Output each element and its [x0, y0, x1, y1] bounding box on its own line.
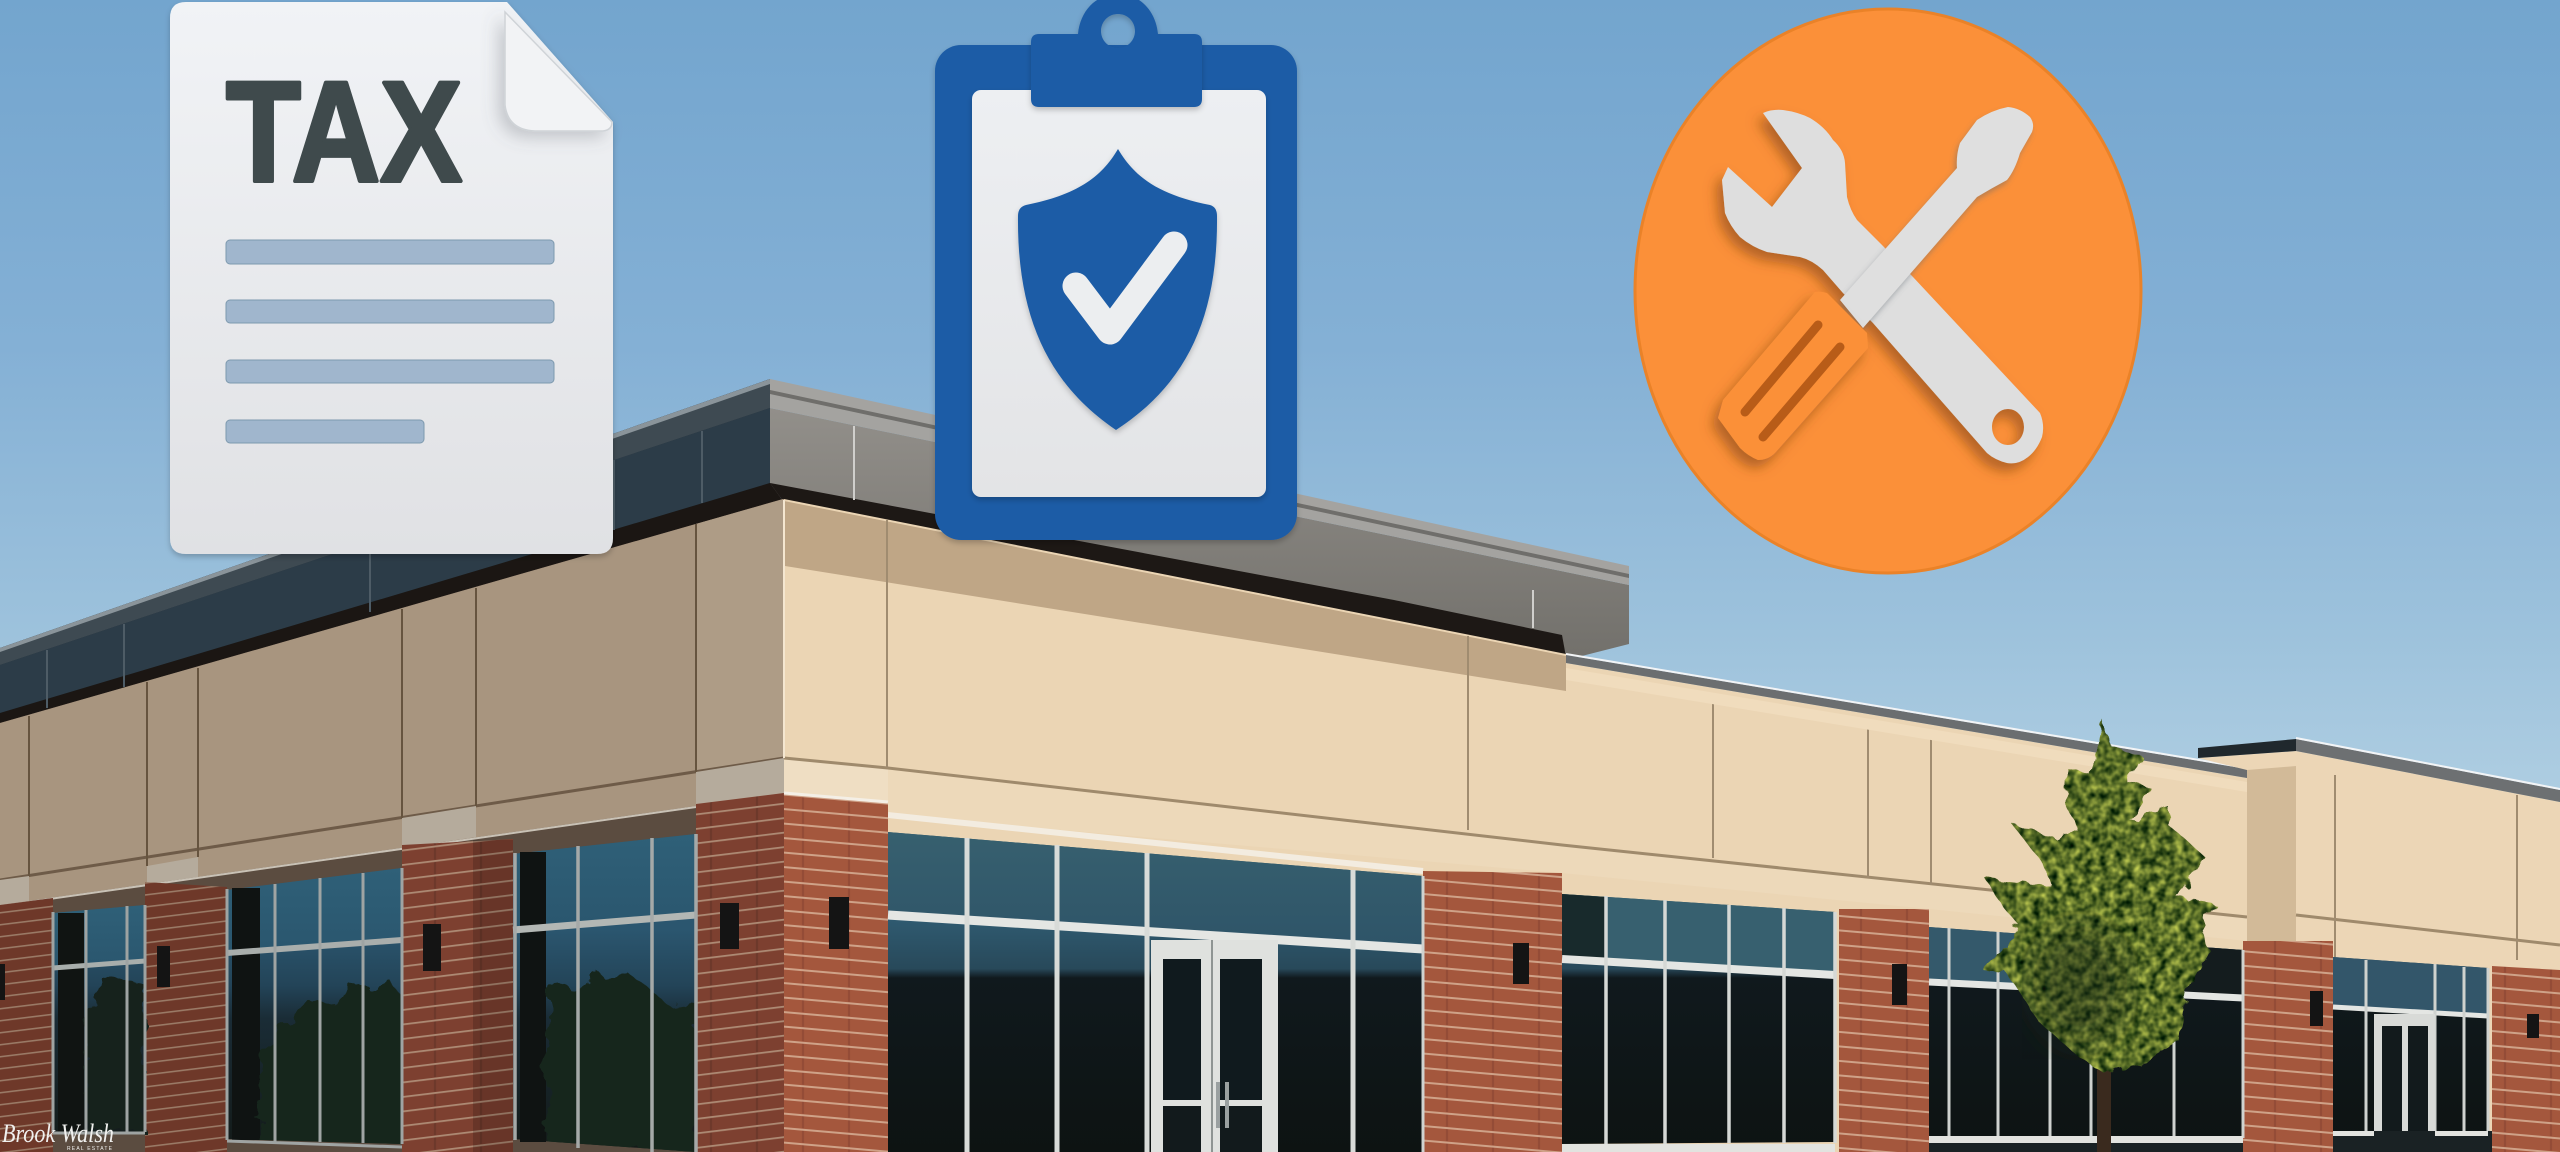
wrench [1722, 110, 2043, 463]
brick piers [0, 793, 2560, 1152]
roof: right grey fascia [770, 379, 1629, 660]
document sheet [170, 2, 613, 554]
building [0, 379, 2560, 1152]
paper sheet [972, 90, 1266, 497]
window and door: far right [2333, 957, 2492, 1152]
label: TAX: TAX [226, 53, 462, 212]
watermark signature: Brook Walsh [2, 1119, 114, 1148]
wall sconces [0, 897, 2539, 1038]
window: centre storefront [888, 832, 1423, 1152]
entrance door [1151, 940, 1278, 1152]
screwdriver handle [1718, 292, 1868, 460]
icon: insurance clipboard [935, 0, 1297, 540]
roof: right low parapet [1566, 654, 2247, 778]
clip and ring [1031, 0, 1202, 107]
right wall [784, 499, 2247, 1152]
icon: tax document [170, 2, 613, 554]
window: left [227, 868, 410, 1150]
text lines placeholder [226, 240, 554, 443]
window: right storefront 1 [1562, 894, 1835, 1152]
check mark [1076, 245, 1174, 331]
window: right storefront 2 [1929, 927, 2243, 1152]
window: far left [53, 905, 145, 1133]
roof: left dark fascia [0, 379, 783, 730]
right tower [2198, 738, 2560, 1152]
left wall [0, 499, 784, 1152]
watermark signature: REAL ESTATE [67, 1146, 113, 1152]
clipboard board [935, 45, 1297, 540]
window: corner left [513, 834, 700, 1152]
tree [1983, 720, 2215, 1152]
folded corner [505, 12, 612, 131]
orange disc [1635, 9, 2141, 573]
shield [1018, 149, 1217, 430]
screwdriver shaft [1840, 107, 2033, 328]
icon: maintenance tools [1635, 9, 2141, 573]
